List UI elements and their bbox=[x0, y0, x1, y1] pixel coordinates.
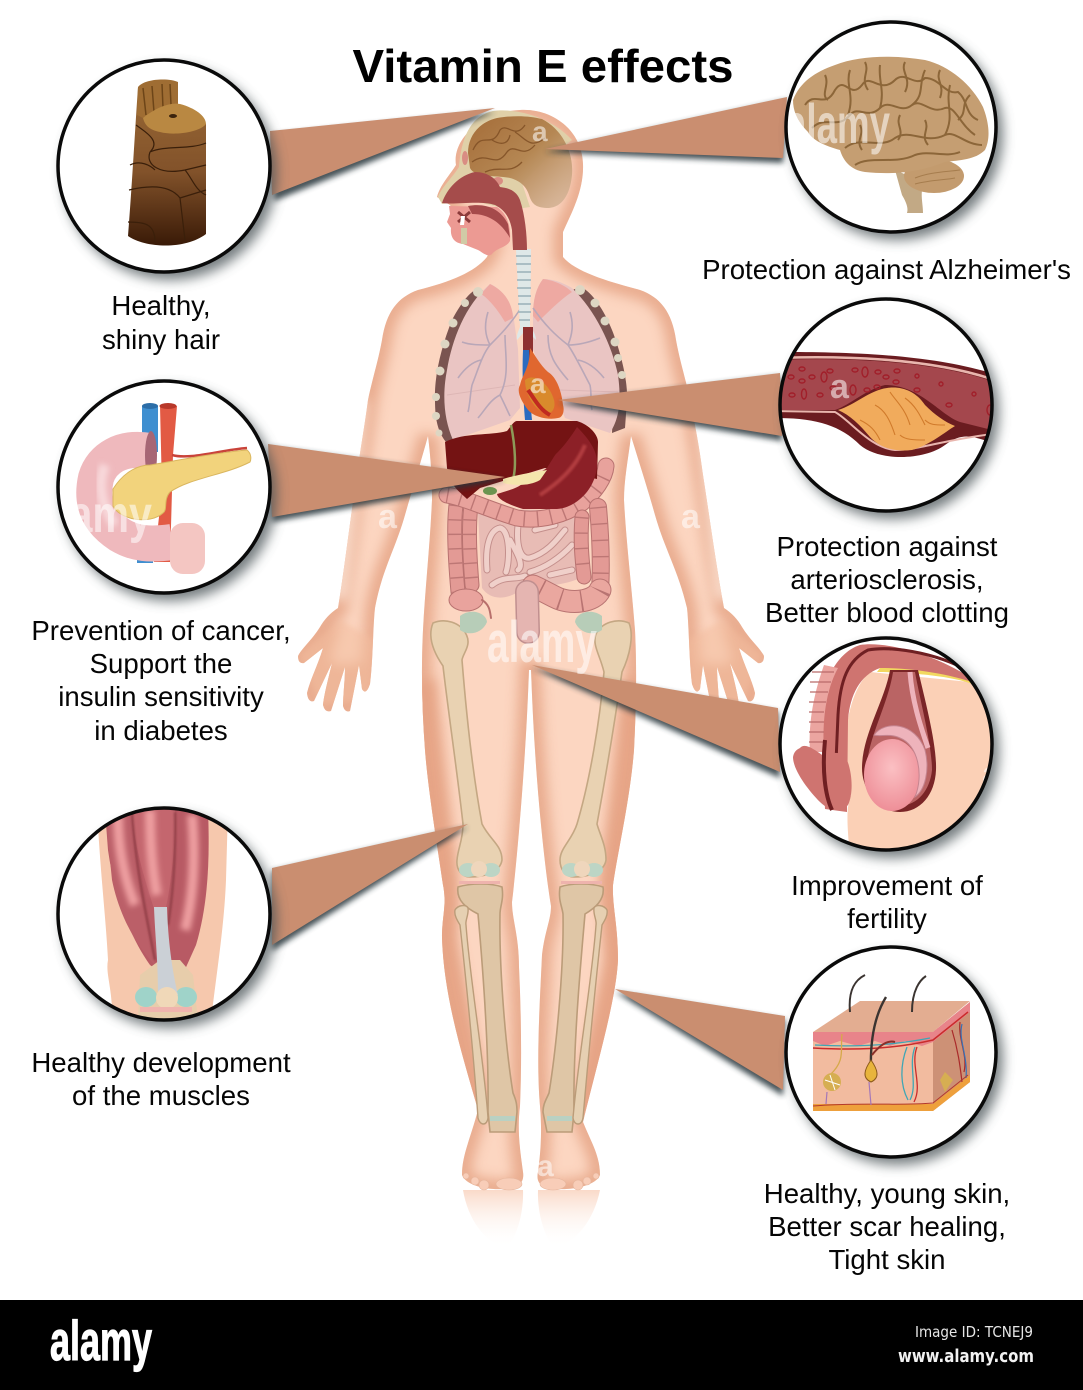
footer bar bbox=[0, 1300, 1083, 1390]
watermark: lamy bbox=[58, 486, 152, 544]
wedge shadows bbox=[270, 100, 787, 1096]
watermark: alamy over body: a bbox=[378, 498, 398, 536]
footer url: www.alamy.com bbox=[898, 1346, 1034, 1367]
nasal cavity bbox=[442, 172, 527, 250]
brain bbox=[468, 116, 572, 208]
liver bbox=[445, 421, 598, 499]
wedge: artery bbox=[558, 373, 782, 436]
text: artery bbox=[765, 531, 1009, 628]
text: skin: Better scar healing, bbox=[768, 1211, 1006, 1242]
panel: testis circle bbox=[780, 638, 1002, 860]
text: muscles: Healthy development bbox=[31, 1047, 291, 1078]
text: pancreas: in diabetes bbox=[94, 715, 228, 746]
text: fertility: fertility bbox=[847, 903, 927, 934]
panel: pancreas circle bbox=[58, 381, 270, 593]
watermark: alamy over body: a bbox=[681, 498, 701, 536]
text: artery: Better blood clotting bbox=[765, 597, 1009, 628]
esophagus, vessel bbox=[523, 327, 533, 420]
icon: duodenum and pancreas bbox=[94, 403, 251, 574]
text: skin bbox=[764, 1178, 1010, 1275]
bronchial tree bbox=[458, 308, 604, 418]
text: hair bbox=[102, 290, 220, 355]
hip cartilage bbox=[460, 612, 602, 633]
text: artery: Protection against bbox=[777, 531, 998, 562]
panel: brain circle bbox=[786, 22, 996, 232]
watermark: a bbox=[982, 755, 1002, 793]
watermark: alamy over body: a bbox=[537, 1150, 554, 1183]
circle shadows bbox=[63, 28, 1003, 1165]
heart bbox=[519, 348, 564, 419]
footer image id: Image ID: TCNEJ9 bbox=[915, 1323, 1033, 1341]
lungs bbox=[432, 279, 627, 442]
head cross-section bbox=[438, 110, 572, 255]
rib beads bbox=[432, 285, 626, 436]
skull bbox=[438, 110, 572, 210]
text: fertility bbox=[791, 870, 983, 934]
foot reflections bbox=[463, 1190, 600, 1248]
panel: hair circle bbox=[58, 60, 270, 272]
watermark: alamy over body: a bbox=[532, 116, 548, 147]
panel: skin circle bbox=[786, 947, 996, 1157]
watermark: a bbox=[830, 368, 850, 406]
wedge: testis bbox=[532, 665, 780, 772]
icon: skin section block bbox=[813, 975, 970, 1111]
watermark: alamy over body: a bbox=[530, 368, 546, 399]
icon: thigh muscles and knee bbox=[97, 805, 228, 1030]
mouth and jaw bbox=[447, 206, 510, 255]
neck and trachea bbox=[516, 249, 536, 340]
text: hair: Healthy, bbox=[111, 290, 211, 321]
footer logo: alamy bbox=[50, 1309, 152, 1372]
wedge: pancreas bbox=[268, 444, 505, 517]
text: muscles bbox=[31, 1047, 291, 1111]
text: pancreas: Support the bbox=[90, 648, 232, 679]
body silhouette bbox=[298, 110, 764, 1189]
text: fertility: Improvement of bbox=[791, 870, 983, 901]
wedge: skin bbox=[615, 989, 785, 1090]
text: hair: shiny hair bbox=[102, 324, 220, 355]
wedge: hair bbox=[270, 108, 495, 195]
icon: brain bbox=[793, 57, 989, 213]
toes bbox=[463, 1173, 599, 1190]
pancreas bbox=[483, 470, 547, 495]
text: pancreas bbox=[31, 615, 291, 746]
panel: artery circle bbox=[775, 299, 1000, 511]
large intestine bbox=[447, 466, 606, 632]
small intestine bbox=[478, 510, 580, 598]
text: brain: Protection against Alzheimer's bbox=[702, 254, 1071, 285]
text: pancreas: Prevention of cancer, bbox=[31, 615, 291, 646]
watermark: alamy bbox=[786, 92, 890, 155]
icon: artery with plaque bbox=[775, 352, 1000, 457]
text: skin: Healthy, young skin, bbox=[764, 1178, 1010, 1209]
text: muscles: of the muscles bbox=[72, 1080, 250, 1111]
text: pancreas: insulin sensitivity bbox=[58, 681, 264, 712]
watermark: alamy over body bbox=[378, 116, 701, 1183]
title: Vitamin E effects bbox=[352, 40, 734, 92]
watermark: alamy over body: alamy bbox=[487, 610, 597, 675]
text: artery: arteriosclerosis, bbox=[790, 564, 984, 595]
right leg bones bbox=[543, 621, 631, 1132]
stomach bbox=[497, 427, 597, 509]
icon: male reproductive section bbox=[793, 644, 1000, 860]
icon: hair shaft bbox=[128, 79, 206, 246]
human body with skeleton and organs bbox=[298, 110, 764, 1190]
callout wedges bbox=[268, 97, 787, 1096]
wedge: brain bbox=[545, 97, 787, 158]
left leg bones bbox=[431, 621, 517, 1132]
wedge: muscles bbox=[272, 824, 468, 945]
text: skin: Tight skin bbox=[828, 1244, 946, 1275]
panel: muscles circle bbox=[58, 805, 270, 1030]
